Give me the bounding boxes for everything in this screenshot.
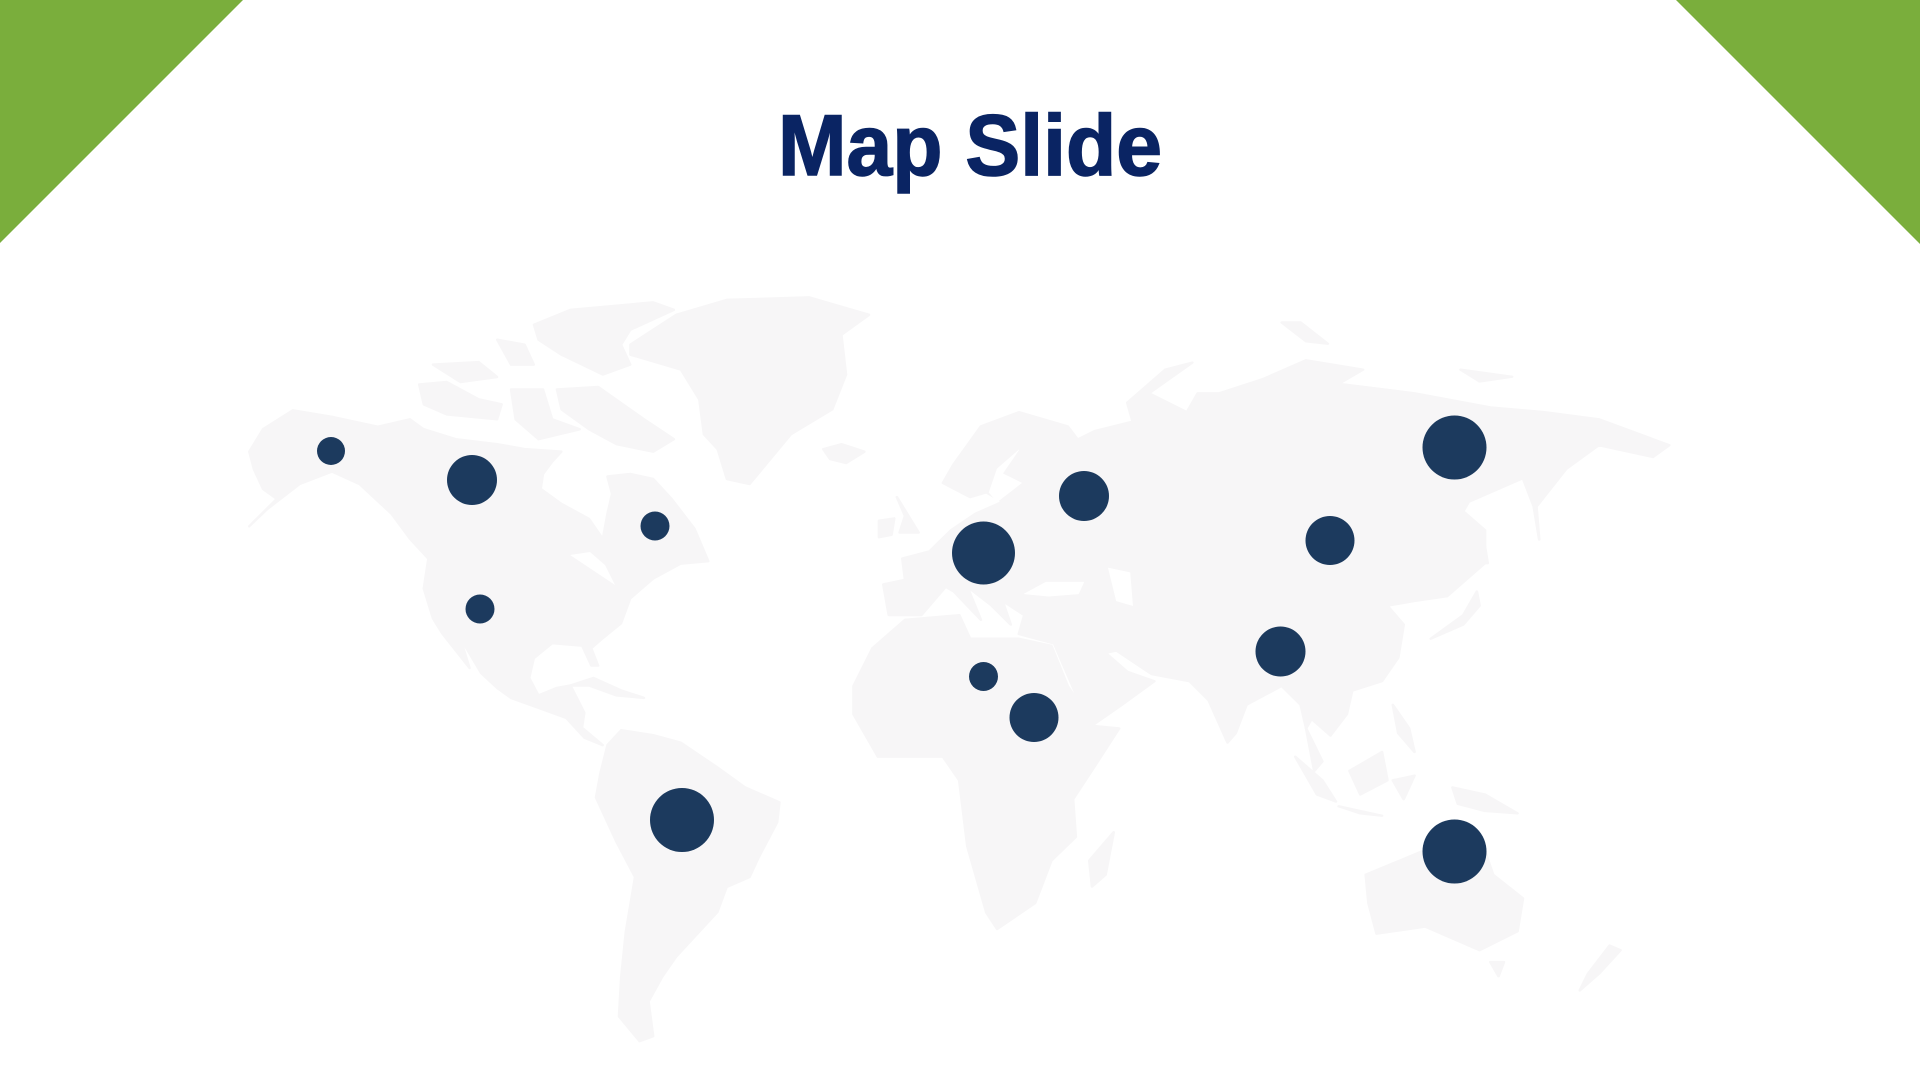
South America [596,730,780,1041]
Caribbean islands [571,678,644,698]
Greenland [630,297,869,484]
Madagascar [1089,832,1114,887]
Arctic islands [419,302,674,452]
marker: Brazil [650,788,714,852]
North America [249,410,708,745]
marker: North Africa [969,662,998,691]
marker: Eastern Canada [640,512,670,540]
marker: Western Canada [447,455,497,505]
top-right green corner triangle [1676,0,1920,244]
Africa [854,615,1119,929]
Inland seas [989,450,1133,606]
Eurasia [883,360,1669,743]
marker: Central Africa [1010,693,1058,742]
Arctic Russian islands [840,314,1512,381]
Great Lakes [570,552,615,585]
map: Eurasia, Africa and Oceania [840,314,1669,990]
marker: Central Asia [1306,516,1354,565]
marker: Central Europe [952,522,1015,584]
Iceland [823,444,865,463]
marker: South Asia [1256,626,1306,676]
world map [249,297,1669,1041]
marker: Western USA [466,594,494,624]
title: Map Slide [778,98,1162,194]
Australia [1366,851,1523,950]
marker: Eastern Russia [1422,416,1486,480]
British Isles [879,497,919,537]
map: Americas and Greenland [249,297,869,1041]
location markers [317,416,1486,884]
marker: Alaska [317,437,345,465]
marker: Australia [1422,820,1486,884]
top-left green corner triangle [0,0,243,243]
Southeast Asian and Pacific islands [1295,530,1620,990]
marker: Eastern Europe [1059,471,1109,521]
